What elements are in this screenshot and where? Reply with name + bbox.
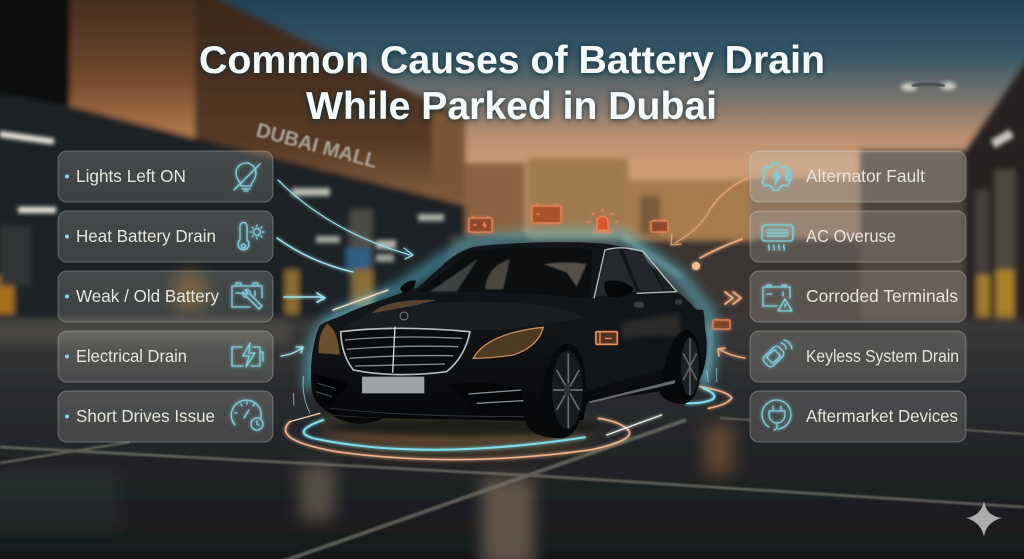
- ground rings: orange and blue energy circles: [285, 368, 732, 460]
- arrows: left side flow into car: [277, 180, 413, 356]
- panel: right causes: [750, 151, 966, 442]
- card: Heat Battery Drain: [58, 211, 273, 262]
- arrow: alternator to car: [671, 178, 748, 245]
- arrow: AC to car: [700, 239, 742, 258]
- car: [311, 242, 707, 438]
- icon: gauge with clock: [231, 400, 263, 430]
- icon: battery with warning triangle: [763, 285, 792, 311]
- arrow: battery to car: [284, 293, 325, 302]
- rear wheel: [658, 330, 701, 404]
- title: While Parked in Dubai: [306, 85, 717, 128]
- card: Weak / Old Battery: Weak / Old Battery: [76, 286, 219, 306]
- icon: battery lower right: [713, 319, 730, 329]
- icon: plug in circle: [762, 400, 791, 430]
- icon: sparkle watermark: [966, 501, 1002, 537]
- grille: [341, 327, 470, 375]
- arrow: heat to car: [277, 238, 353, 272]
- card: Aftermarket Devices: [750, 391, 966, 442]
- hood emblem: [400, 312, 408, 320]
- windshield: [418, 247, 592, 298]
- front tire under bumper: [333, 416, 384, 424]
- side windows: [595, 249, 637, 297]
- card: Weak / Old Battery: [58, 271, 273, 322]
- card: Corroded Terminals: [750, 271, 966, 322]
- icon: battery left: [469, 216, 492, 232]
- arrow: electrical to car: [281, 347, 303, 356]
- card: Aftermarket Devices: Aftermarket Devices: [806, 406, 958, 426]
- background: blurred Dubai mall parking scene: DUBAI MALL: [254, 120, 380, 173]
- arrow: lights to car: [278, 180, 413, 259]
- sill highlight: [588, 380, 675, 403]
- icon: key fob: [761, 340, 792, 369]
- icon: battery with wrench: [232, 283, 262, 309]
- car body: [311, 242, 707, 421]
- icon: gear with bolt: [762, 163, 791, 190]
- card: Corroded Terminals: Corroded Terminals: [806, 286, 958, 306]
- icon: crossed-out bulb: [234, 163, 260, 191]
- title: Common Causes of Battery Drain: [199, 39, 825, 82]
- card: AC Overuse: AC Overuse: [806, 226, 896, 246]
- icon: battery with bolt: [232, 343, 263, 367]
- lower bumper: [313, 373, 348, 408]
- card: Heat Battery Drain: Heat Battery Drain: [76, 226, 216, 246]
- door handles: [634, 302, 644, 308]
- card: Lights Left ON: Lights Left ON: [76, 166, 186, 186]
- license plate: [362, 377, 424, 393]
- hood sheen: [345, 302, 583, 330]
- card: Alternator Fault: [750, 151, 966, 202]
- icon: warning beacon: [587, 209, 618, 232]
- icon: thermometer and sun: [238, 223, 264, 250]
- car aura glow: [310, 235, 711, 390]
- icon: double chevron: [725, 292, 741, 304]
- side mirrors: [604, 280, 633, 297]
- card: Short Drives Issue: [58, 391, 273, 442]
- card: Lights Left ON: [58, 151, 273, 202]
- right headlight: [473, 327, 543, 358]
- orange warning icons above car: [469, 204, 730, 329]
- front wheel: [525, 343, 585, 438]
- card: AC Overuse: [750, 211, 966, 262]
- card: Keyless System Drain: [750, 331, 966, 382]
- icon: air conditioner: [762, 225, 793, 250]
- card: Electrical Drain: [58, 331, 273, 382]
- door battery icon: [596, 332, 617, 344]
- card: Short Drives Issue: Short Drives Issue: [76, 406, 215, 426]
- card: Alternator Fault: Alternator Fault: [806, 166, 925, 186]
- icon: battery right: [651, 220, 668, 232]
- card: Keyless System Drain: Keyless System Drain: [806, 346, 959, 366]
- panel: left causes: [58, 151, 273, 442]
- title: [199, 39, 825, 128]
- card: Electrical Drain: Electrical Drain: [76, 346, 187, 366]
- door panel sheen: [553, 309, 705, 390]
- car shadow: [330, 417, 597, 436]
- streak: [333, 290, 388, 310]
- icon: battery large: [532, 204, 561, 223]
- arrows: right side, orange: [671, 178, 748, 358]
- arrow: keyless to car: [718, 348, 745, 358]
- left headlight: [318, 323, 340, 355]
